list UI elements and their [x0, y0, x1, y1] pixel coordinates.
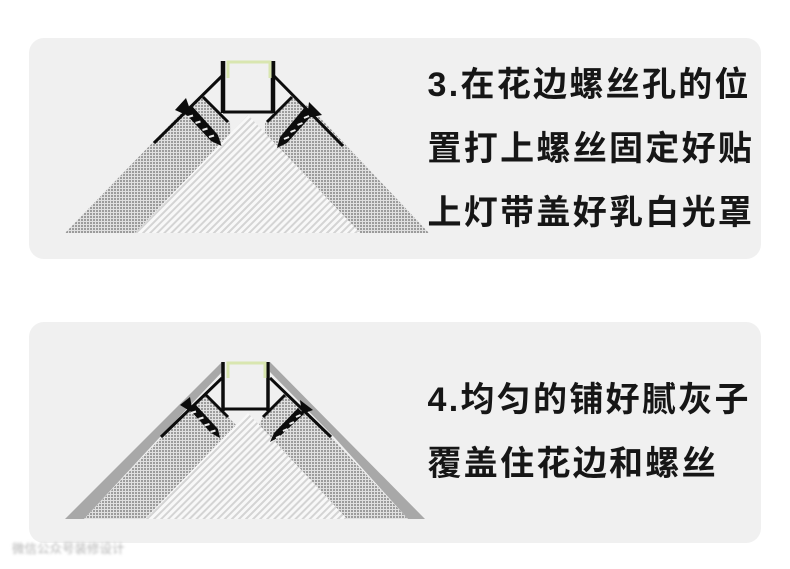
- left screw: [180, 397, 220, 438]
- LED channel: [154, 61, 343, 146]
- text: step 3 line 2: 置打上螺丝固定好贴: [428, 130, 754, 168]
- green diffuser: [228, 363, 265, 378]
- putty layer: [65, 362, 222, 519]
- right screw: [270, 400, 313, 442]
- diagram: step 4: [65, 362, 425, 519]
- panel: step 3 background: [29, 38, 761, 259]
- right plaster moulding: [259, 395, 408, 519]
- panel: step 4 background: [29, 322, 761, 543]
- text: step 3 line 3: 上灯带盖好乳白光罩: [428, 194, 754, 232]
- inner ceiling board: [135, 115, 360, 233]
- left plaster moulding: [65, 97, 231, 233]
- green diffuser: [228, 62, 270, 78]
- LED channel: [161, 362, 331, 437]
- text: step 4 line 1: 4.均匀的铺好腻灰子: [428, 381, 751, 419]
- diagram: step 3: [65, 61, 429, 233]
- left plaster moulding: [84, 395, 236, 519]
- text: step 4 line 2: 覆盖住花边和螺丝: [428, 445, 718, 483]
- left screw: [175, 98, 222, 146]
- watermark: 微信公众号装修设计: [12, 542, 125, 556]
- right screw: [277, 102, 322, 148]
- inner ceiling board: [145, 413, 347, 519]
- text: step 3 line 1: 3.在花边螺丝孔的位: [428, 66, 751, 104]
- right plaster moulding: [265, 97, 429, 233]
